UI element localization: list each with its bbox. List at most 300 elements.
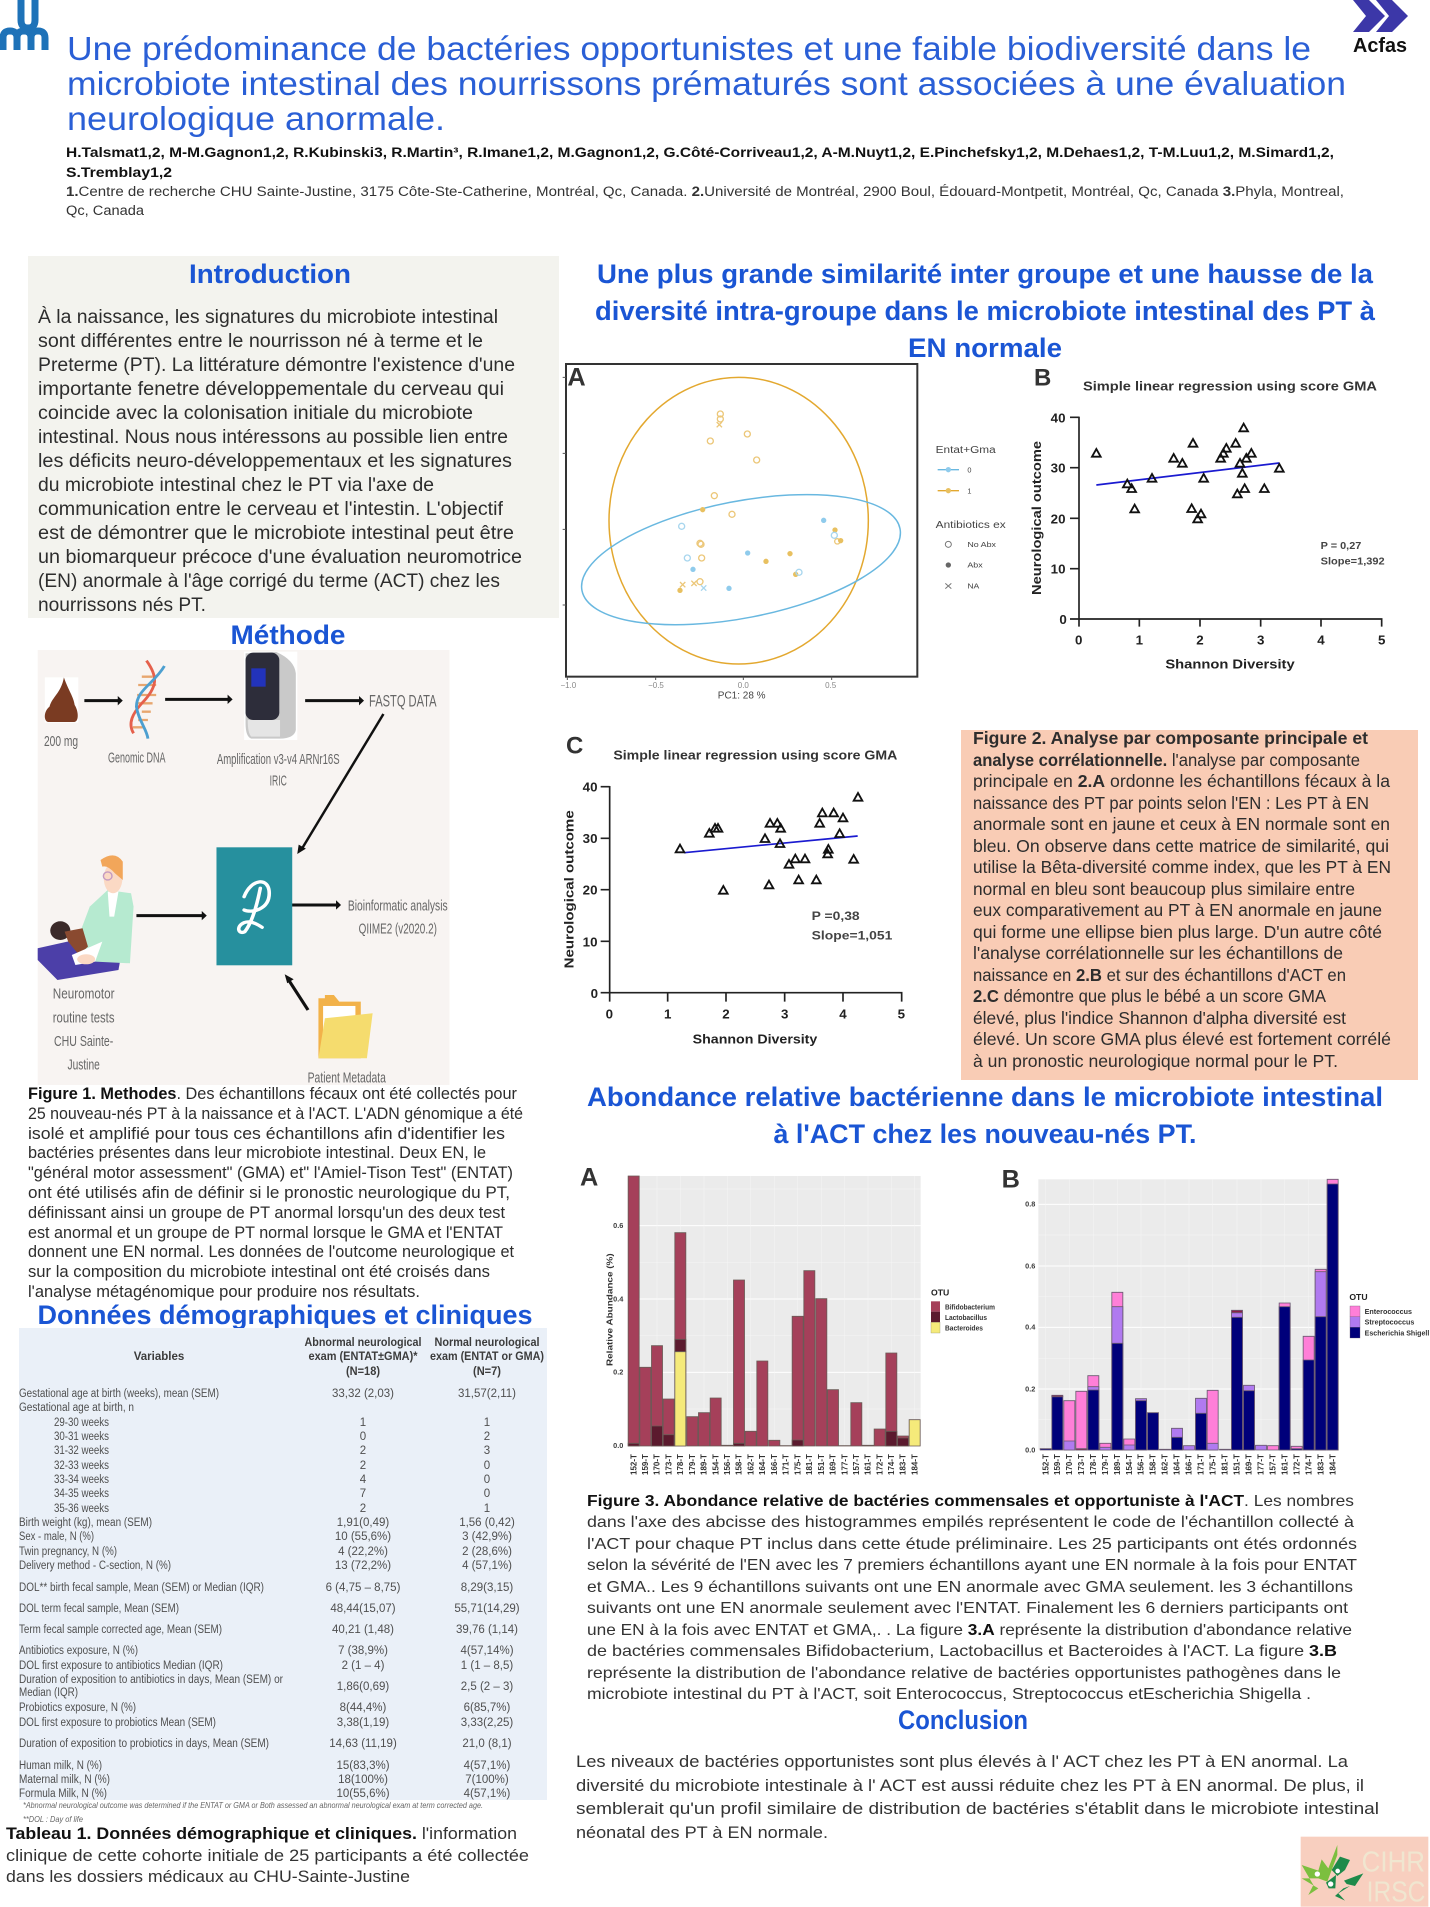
affiliations: [66, 184, 1344, 218]
tick labels: 2: [722, 1007, 730, 1022]
y axis title: Relative Abundance (%): [604, 1253, 614, 1366]
x axis labels: 170-T: [1065, 1454, 1074, 1475]
plot background: [628, 1176, 921, 1446]
x axis labels: 156-T: [1137, 1454, 1146, 1475]
table column: normal exam: 8,29(3,15): [461, 1582, 513, 1594]
labels: pipeline steps: Amplification v3-v4 ARNr16S: [217, 751, 340, 768]
x axis labels: 184-T: [1328, 1454, 1337, 1475]
y axis ticks: 0.4: [613, 1294, 624, 1303]
x axis labels: 172-T: [875, 1454, 884, 1475]
axes: [1070, 417, 1382, 627]
caption: tableau 1: [6, 1824, 529, 1886]
text block: conclusion: diversité du microbiote intestinale à l' ACT est aussi réduite chez les PT à EN anormal. De plus, il: [576, 1776, 1364, 1795]
table header: Abnormal neurological: [304, 1337, 422, 1349]
x axis labels: 157-T: [852, 1454, 861, 1475]
tick labels: 0: [591, 986, 598, 1001]
title: Une prédominance de bactéries opportunistes et une faible biodiversité dans le: [67, 30, 1311, 67]
legend: 1: [967, 486, 971, 495]
panel: figure 2 caption: qui forme une ellipse bien plus large. D'un autre côté: [973, 922, 1382, 942]
table column: normal exam: 0: [484, 1474, 490, 1486]
legend: [1349, 1292, 1429, 1338]
tick labels: 20: [583, 883, 597, 898]
text block: introduction: intestinal. Nous nous intéressons au possible lien entre: [38, 427, 508, 448]
labels: pipeline steps: CHU Sainte-: [54, 1033, 113, 1050]
table rows: variables: Delivery method - C-section, N (%): [19, 1560, 171, 1572]
x axis labels: 171-T: [782, 1454, 791, 1475]
legend: No Abx: [967, 540, 996, 549]
text block: introduction: du microbiote intestinal chez le PT via l'axe de: [38, 475, 434, 496]
heading: abondance relative: à l'ACT chez les nouveau-nés PT.: [774, 1119, 1196, 1149]
table header: exam (ENTAT±GMA)*: [308, 1351, 418, 1363]
x axis labels: 181-T: [805, 1454, 814, 1475]
y axis ticks: 0.8: [1025, 1200, 1035, 1209]
heading: données démographiques: Données démographiques et cliniques: [38, 1300, 532, 1330]
text block: introduction: est de démontrer que le microbiote intestinal peut être: [38, 523, 514, 544]
authors: S.Tremblay1,2: [66, 165, 172, 180]
icon: sequencer: [244, 652, 297, 740]
table column: normal exam: 2 (28,6%): [462, 1546, 512, 1558]
text block: introduction: [38, 307, 522, 616]
x axis labels: 154-T: [711, 1454, 720, 1475]
points: normal: [679, 518, 837, 591]
text block: introduction: un biomarqueur précoce d'une évaluation neuromotrice: [38, 547, 522, 568]
panel: figure 2 caption: anormale sont en jaune et ceux à EN normale sont en: [973, 814, 1390, 834]
table column: normal exam: 3,33(2,25): [461, 1717, 513, 1729]
table header: Normal neurological: [434, 1337, 540, 1349]
table rows: variables: 29-30 weeks: [54, 1417, 109, 1429]
x axis labels: 177-T: [840, 1454, 849, 1475]
legend: Bacteroides: [945, 1324, 983, 1333]
panel: figure 2 caption: eux comparativement au PT à EN anormale en jaune: [973, 900, 1382, 920]
table header: exam (ENTAT or GMA): [430, 1351, 544, 1363]
caption: figure 3: une EN à la fois avec ENTAT et GMA,. . La figure 3.A représente la distribution d'abondance relative: [587, 1622, 1352, 1639]
table column: abnormal exam: 48,44(15,07): [330, 1603, 396, 1615]
caption: figure 3: l'ACT pour chaque PT inclus dans cette étude préliminaire. Les 25 participants ont étés ordonnés: [587, 1536, 1357, 1553]
table column: abnormal exam: 1,91(0,49): [337, 1517, 389, 1529]
y axis ticks: [1025, 1200, 1036, 1454]
table column: abnormal exam: 7: [360, 1488, 366, 1500]
x axis labels: 177-T: [1257, 1454, 1266, 1475]
table column: normal exam: 2,5 (2 – 3): [461, 1681, 513, 1693]
table column: abnormal exam: 7 (38,9%): [338, 1645, 388, 1657]
text block: introduction: importante fenetre développementale du cerveau qui: [38, 379, 504, 400]
panel: figure 2 caption: Figure 2. Analyse par composante principale et: [973, 728, 1368, 748]
caption: figure 3: de bactéries commensales Bifidobacterium, Lactobacillus et Bacteroides à l'ACT. La figure 3.B: [587, 1643, 1337, 1660]
x axis labels: 172-T: [1292, 1454, 1301, 1475]
x axis labels: 151-T: [1233, 1454, 1242, 1475]
x axis labels: 161-T: [864, 1454, 873, 1475]
x axis labels: 183-T: [899, 1454, 908, 1475]
chart 3A: commensal bacteria: [580, 1163, 995, 1475]
x axis labels: 157-T: [1269, 1454, 1278, 1475]
axis labels: [560, 681, 837, 701]
table rows: variables: Gestational age at birth (weeks), mean (SEM): [19, 1388, 219, 1400]
legend: NA: [967, 582, 979, 591]
x axis labels: 175-T: [1208, 1454, 1217, 1475]
text block: conclusion: semblerait qu'un profil similaire de distribution de bactéries s'établit dans le microbiote intestinal: [576, 1799, 1379, 1818]
x axis labels: 169-T: [829, 1454, 838, 1475]
table footnotes: *Abnormal neurological outcome was determined if the ENTAT or GMA or Both assessed an abnormal neurological exam at term corrected age.: [23, 1801, 483, 1810]
tick labels: 0: [1059, 612, 1067, 627]
labels: pipeline steps: [44, 691, 448, 1086]
x axis labels: 159-T: [1053, 1454, 1062, 1475]
text block: introduction: À la naissance, les signatures du microbiote intestinal: [38, 307, 498, 328]
panel: figure 2 caption: normal en bleu sont beaucoup plus similaire entre: [973, 879, 1355, 899]
x axis labels: 179-T: [1101, 1454, 1110, 1475]
data points: [1092, 424, 1284, 522]
table column: normal exam: 1: [484, 1417, 490, 1429]
chart A: PCoA: [560, 363, 1006, 701]
tick labels: [583, 779, 906, 1022]
table column: normal exam: 1: [484, 1503, 490, 1515]
table column: abnormal exam: 40,21 (1,48): [332, 1624, 394, 1636]
affiliations: 1.Centre de recherche CHU Sainte-Justine, 3175 Côte-Ste-Catherine, Montréal, Qc, Canada. 2.Université de Montréal, 2900 Boul, Édouard-Montpetit, Montréal, Qc, Canada 3.Phyla, Montreal,: [66, 184, 1344, 199]
table column: abnormal exam: 6 (4,75 – 8,75): [326, 1582, 401, 1594]
table rows: variables: Antibiotics exposure, N (%): [19, 1645, 138, 1657]
legend: 0: [967, 465, 971, 474]
x axis labels: 178-T: [1089, 1454, 1098, 1475]
chart 3B: opportunistic bacteria: [1002, 1165, 1429, 1475]
table rows: variables: Duration of exposition to probiotics in days, Mean (SEM): [19, 1738, 269, 1750]
axis labels: −0.5: [648, 681, 664, 690]
panel: figure 2 caption: principale en 2.A ordonne les échantillons fécaux à la: [973, 771, 1390, 791]
table column: normal exam: 7(100%): [465, 1774, 509, 1786]
y axis ticks: 0.6: [1025, 1261, 1035, 1270]
legend: Escherichia Shigell: [1365, 1328, 1429, 1337]
table column: abnormal exam: 4: [360, 1474, 367, 1486]
text block: introduction: les déficits neuro-développementaux et les signatures: [38, 451, 512, 472]
caption: figure 3: selon la sévérité de l'EN avec les 7 premiers échantillons ayant une EN normale à la fois pour ENTAT: [587, 1557, 1357, 1574]
table column: normal exam: 3: [484, 1445, 490, 1457]
ellipse: normal: [571, 471, 911, 648]
icon: clinician with baby: [38, 855, 134, 980]
x axis labels: 156-T: [723, 1454, 732, 1475]
table column: normal exam: 55,71(14,29): [454, 1603, 520, 1615]
tick labels: 0: [1075, 632, 1082, 647]
x axis labels: 173-T: [1077, 1454, 1086, 1475]
legend: Antibiotics ex: [936, 520, 1006, 531]
tick labels: 2: [1196, 632, 1204, 647]
tick labels: 4: [839, 1007, 847, 1022]
y axis ticks: 0.2: [613, 1368, 623, 1377]
table column: abnormal exam: 2: [360, 1503, 366, 1515]
legend: Streptococcus: [1365, 1318, 1414, 1327]
heading: similarité: EN normale: [908, 333, 1062, 363]
table rows: variables: Term fecal sample corrected age, Mean (SEM): [19, 1624, 222, 1636]
labels: pipeline steps: Neuromotor: [53, 986, 115, 1002]
caption: tableau 1: clinique de cette cohorte initiale de 25 participants a été collectée: [6, 1846, 529, 1865]
label A: A: [580, 1163, 598, 1191]
table rows: variables: Sex - male, N (%): [19, 1531, 94, 1543]
title: microbiote intestinal des nourrissons prématurés sont associées à une évaluation: [67, 65, 1346, 102]
panel: method diagram: [38, 650, 449, 1086]
caption: figure 3: [587, 1493, 1357, 1703]
panel: figure 2 caption: utilise la Bêta-diversité comme index, que les PT à EN: [973, 857, 1391, 877]
table column: abnormal exam: 8(44,4%): [340, 1702, 386, 1714]
caption: figure 3: suivants ont une EN anormale seulement avec l'ENTAT. Finalement les 6 derniers participants ont: [587, 1600, 1349, 1617]
heading: similarité: Une plus grande similarité inter groupe et une hausse de la: [597, 259, 1374, 289]
axis labels: PC1: 28 %: [718, 690, 766, 701]
caption: figure 1: isolé et amplifié pour tous ces échantillons afin d'identifier les: [28, 1125, 505, 1143]
table rows: variables: Median (IQR): [19, 1687, 78, 1699]
table column: normal exam: 0: [484, 1460, 490, 1472]
chart C: regression at term: [562, 733, 906, 1047]
caption: figure 1: 25 nouveau-nés PT à la naissance et à l'ACT. L'ADN génomique a été: [28, 1105, 523, 1123]
caption: figure 3: microbiote intestinal du PT à l'ACT, soit Enterococcus, Streptococcus etEscherichia Shigella .: [587, 1686, 1311, 1703]
x axis labels: 162-T: [1161, 1454, 1170, 1475]
panel: figure 2 caption: analyse corrélationnelle. l'analyse par composante: [973, 750, 1360, 770]
arrows: pipeline: [84, 695, 383, 1010]
legend: Lactobacillus: [945, 1313, 987, 1322]
caption: figure 1: est anormal et un groupe de PT normal lorsque le GMA et l'ENTAT: [28, 1224, 503, 1242]
tick labels: 10: [583, 934, 597, 949]
y axis ticks: 0.2: [1025, 1384, 1035, 1393]
x axis labels: 179-T: [688, 1454, 697, 1475]
stacked bars: [1040, 1179, 1338, 1450]
tick labels: 1: [1136, 632, 1144, 647]
table column: abnormal exam: 18(100%): [338, 1774, 388, 1786]
y axis ticks: 0.0: [613, 1441, 623, 1450]
caption: figure 1: "général motor assessment" (GMA) et" l'Amiel-Tison Test" (ENTAT): [28, 1164, 513, 1182]
icon: teal P logo: [216, 847, 292, 965]
table column: normal exam: 2: [484, 1431, 490, 1443]
tick labels: 5: [1378, 632, 1386, 647]
x axis labels: [629, 1454, 919, 1475]
labels: pipeline steps: QIIME2 (v2020.2): [359, 921, 437, 937]
labels: pipeline steps: Justine: [67, 1057, 100, 1073]
table column: abnormal exam: 4 (22,2%): [338, 1546, 388, 1558]
x axis labels: [1041, 1454, 1337, 1475]
axes: [601, 786, 902, 1002]
x axis labels: 164-T: [1173, 1454, 1182, 1475]
x axis labels: 166-T: [1185, 1454, 1194, 1475]
legend: OTU: [931, 1287, 949, 1297]
axis labels: 0.0: [738, 681, 749, 690]
table rows: variables: Maternal milk, N (%): [19, 1774, 110, 1786]
label B: B: [1034, 364, 1051, 391]
x axis labels: 184-T: [910, 1454, 919, 1475]
authors: H.Talsmat1,2, M-M.Gagnon1,2, R.Kubinski3, R.Martin³, R.Imane1,2, M.Gagnon1,2, G.Côté-Corriveau1,2, A-M.Nuyt1,2, E.Pinchefsky1,2, M.Dehaes1,2, T-M.Luu1,2, M.Simard1,2,: [66, 145, 1334, 160]
caption: figure 1: définissant ainsi un groupe de PT anormal lorsqu'un des deux test: [28, 1204, 505, 1222]
table rows: variables: 32-33 weeks: [54, 1460, 109, 1472]
table column: normal exam: 4 (57,1%): [462, 1560, 512, 1572]
caption: figure 1: sur la composition du microbiote intestinal ont été croisés dans: [28, 1263, 490, 1281]
table rows: variables: 33-34 weeks: [54, 1474, 109, 1486]
panel: figure 2 caption: élevé, plus l'indice Shannon d'alpha diversité est: [973, 1008, 1346, 1028]
tick labels: 40: [1051, 410, 1065, 425]
x axis labels: 174-T: [887, 1454, 896, 1475]
panel: figure 2 caption: bleu. On observe dans cette matrice de similarité, qui: [973, 836, 1389, 856]
text block: conclusion: néonatal des PT à EN normale.: [576, 1823, 828, 1842]
x axis labels: 170-T: [653, 1454, 662, 1475]
tick labels: 0: [606, 1007, 613, 1022]
table rows: variables: Duration of exposition to antibiotics in days, Mean (SEM) or: [19, 1674, 283, 1686]
tick labels: 3: [1257, 632, 1264, 647]
panel: figure 2 caption: 2.C démontre que plus le bébé a un score GMA: [973, 986, 1326, 1006]
x axis labels: 171-T: [1197, 1454, 1206, 1475]
table column: abnormal exam: 13 (72,2%): [335, 1560, 391, 1572]
table column: abnormal exam: 2 (1 – 4): [342, 1660, 385, 1672]
labels: pipeline steps: Patient Metadata: [308, 1070, 386, 1086]
table column: abnormal exam: 14,63 (11,19): [329, 1738, 397, 1750]
chart title: Simple linear regression using score GMA: [1083, 379, 1377, 394]
logo: CIHR IRSC: [1301, 1837, 1428, 1907]
tick labels: [1051, 410, 1386, 647]
stats: P = 0,27: [1321, 541, 1362, 552]
plot background: [1038, 1179, 1338, 1450]
stats: Slope=1,392: [1321, 557, 1385, 568]
table footnotes: [23, 1801, 483, 1824]
heading: abondance relative: [587, 1082, 1383, 1149]
x axis labels: 173-T: [664, 1454, 673, 1475]
legend: Bifidobacterium: [945, 1302, 995, 1311]
table header: Variables: [134, 1351, 184, 1363]
tick labels: 4: [1317, 632, 1325, 647]
label C: C: [566, 733, 583, 760]
legend: Entat+Gma: [936, 445, 996, 456]
x axis labels: 158-T: [735, 1454, 744, 1475]
icon: DNA helix: [131, 661, 164, 739]
table footnotes: **DOL : Day of life: [23, 1815, 83, 1824]
caption: figure 3: représente la distribution de l'abondance relative de bactéries opportunistes pathogènes dans le: [587, 1665, 1341, 1682]
text block: introduction: communication entre le cerveau et l'intestin. L'objectif: [38, 499, 504, 520]
table column: normal exam: 31,57(2,11): [458, 1388, 516, 1400]
panel: figure 2 caption: à un pronostic neurologique normal pour le PT.: [973, 1051, 1338, 1071]
x axis labels: 152-T: [1041, 1454, 1050, 1475]
table rows: variables: 30-31 weeks: [54, 1431, 109, 1443]
table rows: variables: 34-35 weeks: [54, 1488, 109, 1500]
x axis labels: 166-T: [770, 1454, 779, 1475]
caption: figure 1: bactéries présentes dans leur microbiote intestinal. Deux EN, le: [28, 1144, 486, 1162]
table column: abnormal exam: 10 (55,6%): [335, 1531, 391, 1543]
y axis ticks: 0.4: [1025, 1323, 1036, 1332]
ellipse: abnormal: [609, 377, 868, 664]
heading: abondance relative: Abondance relative bactérienne dans le microbiote intestinal: [587, 1082, 1383, 1112]
x axis labels: 189-T: [700, 1454, 709, 1475]
table rows: variables: Formula Milk, N (%): [19, 1788, 107, 1800]
tick labels: 1: [664, 1007, 672, 1022]
logo: CIHR IRSC: CIHR: [1362, 1847, 1425, 1879]
panel: introduction: [28, 256, 559, 618]
table column: abnormal exam: 15(83,3%): [336, 1760, 390, 1772]
table column: normal exam: 4(57,1%): [464, 1760, 510, 1772]
title: neurologique anormale.: [67, 100, 445, 137]
axis labels: −1.0: [560, 681, 577, 690]
text block: introduction: (EN) anormale à l'âge corrigé du terme (ACT) chez les: [38, 571, 500, 592]
x axis labels: 181-T: [1221, 1454, 1230, 1475]
table rows: variables: DOL term fecal sample, Mean (SEM): [19, 1603, 179, 1615]
x axis labels: 161-T: [1280, 1454, 1289, 1475]
table column: normal exam: 6(85,7%): [464, 1702, 510, 1714]
table column: abnormal exam: 3,38(1,19): [337, 1717, 389, 1729]
stats: [812, 909, 892, 942]
y axis ticks: 0.6: [613, 1221, 623, 1230]
table column: normal exam: [454, 1388, 520, 1800]
heading: méthode: Méthode: [230, 620, 346, 650]
x axis labels: 178-T: [676, 1454, 685, 1475]
x axis labels: 152-T: [629, 1454, 638, 1475]
table header: (N=7): [473, 1366, 501, 1378]
tick labels: 20: [1051, 511, 1065, 526]
table rows: variables: 31-32 weeks: [54, 1445, 109, 1457]
table header: (N=18): [346, 1366, 380, 1378]
labels: pipeline steps: IRIC: [270, 773, 287, 790]
table column: normal exam: 4(57,1%): [464, 1788, 510, 1800]
table rows: variables: DOL first exposure to antibiotics Median (IQR): [19, 1660, 223, 1672]
labels: pipeline steps: FASTQ DATA: [369, 691, 437, 711]
table column: normal exam: 1 (1 – 8,5): [461, 1660, 513, 1672]
caption: tableau 1: Tableau 1. Données démographique et cliniques. l'information: [6, 1824, 517, 1843]
legend: OTU: [1349, 1292, 1368, 1302]
regression line: [684, 836, 858, 853]
tick labels: 30: [1051, 461, 1065, 476]
table column: normal exam: 0: [484, 1488, 490, 1500]
caption: figure 1: [28, 1085, 523, 1301]
table column: abnormal exam: 33,32 (2,03): [332, 1388, 394, 1400]
text block: conclusion: [576, 1752, 1379, 1842]
table column: abnormal exam: 1,86(0,69): [337, 1681, 389, 1693]
regression line: [1096, 463, 1279, 485]
table column: normal exam: 4(57,14%): [460, 1645, 514, 1657]
table rows: variables: Birth weight (kg), mean (SEM): [19, 1517, 152, 1529]
affiliations: Qc, Canada: [66, 203, 145, 218]
table column: normal exam: 39,76 (1,14): [456, 1624, 518, 1636]
text block: conclusion: Les niveaux de bactéries opportunistes sont plus élevés à l' ACT chez les PT à EN anormal. La: [576, 1752, 1349, 1771]
tick labels: 30: [583, 831, 597, 846]
tick labels: 40: [583, 779, 597, 794]
table rows: variables: Probiotics exposure, N (%): [19, 1702, 136, 1714]
table rows: variables: Twin pregnancy, N (%): [19, 1546, 117, 1558]
table column: normal exam: 1,56 (0,42): [459, 1517, 515, 1529]
x axis labels: 183-T: [1316, 1454, 1325, 1475]
legend: Enterococcus: [1365, 1307, 1412, 1316]
logo: Acfas: Acfas: [1353, 35, 1407, 57]
caption: figure 3: et GMA.. Les 9 échantillons suivants ont une EN anormale avec GMA seulement. les 3 échantillons: [587, 1579, 1353, 1596]
label B: B: [1002, 1165, 1020, 1193]
y axis ticks: 0.0: [1025, 1445, 1035, 1454]
legend: Abx: [967, 561, 983, 570]
panel: figure 2 caption: l'analyse corrélationnelle sur les échantillons de: [973, 943, 1343, 963]
table column: normal exam: 3 (42,9%): [462, 1531, 512, 1543]
heading: similarité: diversité intra-groupe dans le microbiote intestinal des PT à: [595, 296, 1376, 326]
text block: introduction: coincide avec la colonisation initiale du microbiote: [38, 403, 473, 424]
title: [67, 30, 1346, 137]
chart title: Simple linear regression using score GMA: [613, 748, 897, 762]
y axis title: Neurological outcome: [1029, 441, 1044, 595]
x axis title: Shannon Diversity: [1165, 657, 1295, 672]
caption: figure 3: dans l'axe des abcisse des histogrammes empilés représentent le code de l'échantillon collecté à: [587, 1514, 1354, 1531]
tick labels: 10: [1051, 562, 1065, 577]
x axis labels: 175-T: [793, 1454, 802, 1475]
x axis labels: 169-T: [1245, 1454, 1254, 1475]
legend: [936, 445, 1006, 591]
panel: figure 2 caption: élevé. Un score GMA plus élevé est fortement corrélé: [973, 1029, 1391, 1049]
heading: introduction: Introduction: [189, 259, 351, 289]
labels: pipeline steps: 200 mg: [44, 733, 78, 750]
stats: P =0,38: [812, 909, 860, 923]
x axis labels: 162-T: [746, 1454, 755, 1475]
x axis labels: 154-T: [1125, 1454, 1134, 1475]
stacked bars: [628, 1176, 920, 1446]
logo: Acfas: [1353, 0, 1408, 57]
icon: stool sample: [45, 677, 78, 723]
caption: figure 1: l'analyse métagénomique pour produire nos résultats.: [28, 1283, 420, 1301]
data points: [676, 793, 862, 894]
points: abnormal: [677, 411, 843, 593]
table column: abnormal exam: 0: [360, 1431, 366, 1443]
authors: [66, 145, 1334, 180]
x axis labels: 159-T: [641, 1454, 650, 1475]
